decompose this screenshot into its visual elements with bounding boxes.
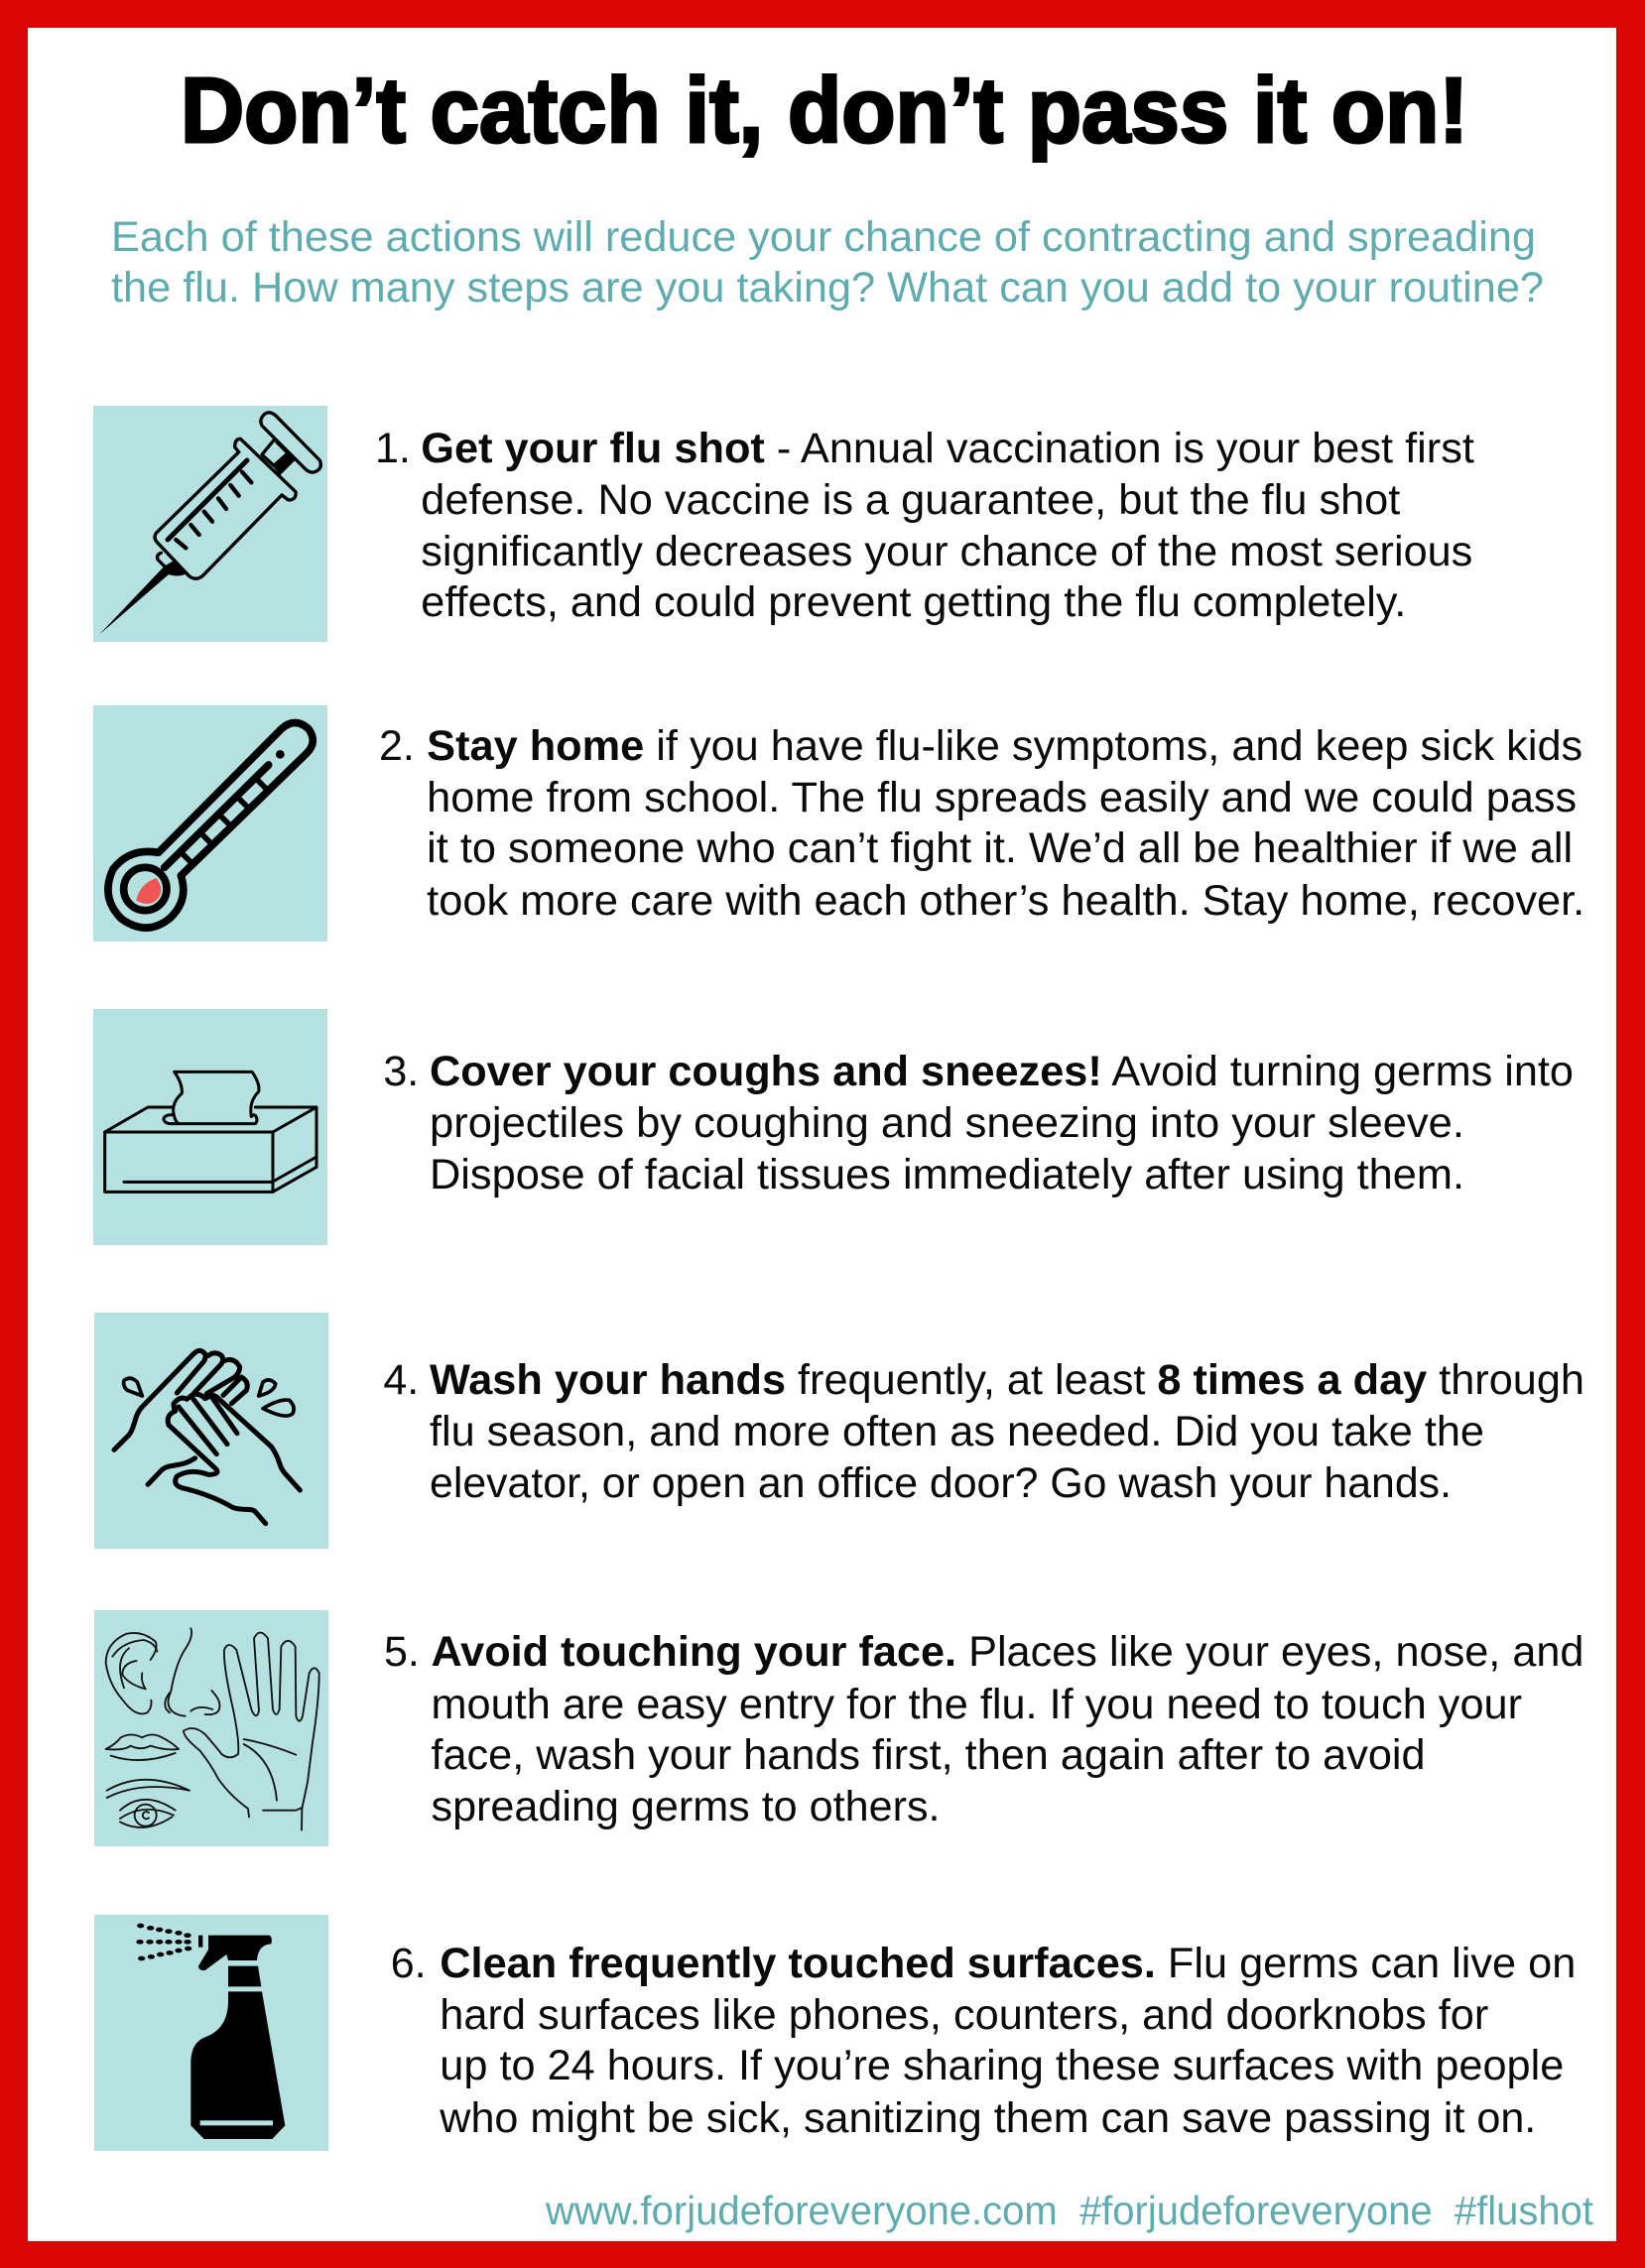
text: step 4: flu season, and more often as needed. Did you take the (430, 1408, 1484, 1455)
text: step 6: hard surfaces like phones, counters, and doorknobs for (440, 1991, 1488, 2039)
text: step 1: defense. No vaccine is a guarantee, but the flu shot (421, 476, 1400, 524)
text: step 1: significantly decreases your chance of the most serious (421, 528, 1472, 575)
text: step 4 (383, 1356, 1584, 1507)
text: step 5: face, wash your hands first, then again after to avoid (431, 1731, 1425, 1779)
text: step 3: 3. (383, 1048, 419, 1095)
panel: step 1 flu shot (93, 406, 1474, 642)
text: step 6: 6. (391, 1940, 427, 1987)
panel: step 6 clean surfaces (94, 1915, 1576, 2151)
subtitle text block: the flu. How many steps are you taking? What can you add to your routine? (111, 265, 1544, 312)
panel: step 2 stay home (93, 705, 1584, 942)
text: step 5: mouth are easy entry for the flu. If you need to touch your (431, 1681, 1522, 1728)
subtitle text block: Each of these actions will reduce your chance of contracting and spreading (111, 214, 1536, 261)
icon: washing hands (94, 1313, 328, 1549)
text: step 4: Wash your hands frequently, at least 8 times a day through (430, 1356, 1584, 1404)
text: step 3: projectiles by coughing and sneezing into your sleeve. (430, 1099, 1464, 1147)
text: step 5 (384, 1628, 1583, 1830)
text: step 5: 5. (384, 1628, 420, 1676)
text: step 6: Clean frequently touched surfaces. Flu germs can live on (440, 1940, 1576, 1987)
text: step 6: up to 24 hours. If you’re sharing these surfaces with people (440, 2042, 1564, 2089)
text: step 2: it to someone who can’t fight it. We’d all be healthier if we all (427, 824, 1573, 872)
icon: ear, nose, lips, eye and hand (94, 1610, 328, 1846)
text: step 2: Stay home if you have flu-like symptoms, and keep sick kids (427, 722, 1582, 770)
icon: syringe (93, 406, 327, 642)
text: step 5: Avoid touching your face. Places like your eyes, nose, and (431, 1628, 1583, 1676)
panel: step 4 wash hands (94, 1313, 1584, 1549)
text: step 2 (379, 722, 1584, 925)
text: step 1: Get your flu shot - Annual vaccination is your best first (421, 425, 1474, 472)
text: step 2: 2. (379, 722, 415, 770)
text: step 3: Cover your coughs and sneezes! Avoid turning germs into (430, 1048, 1574, 1095)
icon: spray bottle (94, 1915, 328, 2151)
text: step 4: elevator, or open an office door? Go wash your hands. (430, 1459, 1452, 1507)
panel: step 5 avoid touching face (94, 1610, 1583, 1846)
icon: thermometer (93, 705, 327, 942)
icon: tissue box (93, 1009, 327, 1245)
text: step 6: who might be sick, sanitizing them can save passing it on. (439, 2094, 1536, 2142)
text: step 3: Dispose of facial tissues immediately after using them. (430, 1151, 1464, 1198)
footer links and hashtags: www.forjudeforeveryone.com #forjudeforeveryone #flushot (545, 2188, 1594, 2233)
text: step 3 (383, 1048, 1574, 1198)
panel: step 3 cover coughs (93, 1009, 1574, 1245)
text: step 1 (375, 425, 1474, 626)
text: step 5: spreading germs to others. (431, 1783, 941, 1830)
text: step 1: effects, and could prevent getting the flu completely. (421, 578, 1406, 626)
text: step 2: took more care with each other’s health. Stay home, recover. (427, 877, 1584, 925)
text: step 4: 4. (383, 1356, 419, 1404)
text: step 6 (391, 1940, 1576, 2142)
text: step 2: home from school. The flu spreads easily and we could pass (427, 774, 1577, 821)
text: step 1: 1. (375, 425, 411, 472)
title: Don’t catch it, don’t pass it on! (181, 59, 1468, 162)
subtitle text block (111, 214, 1544, 312)
